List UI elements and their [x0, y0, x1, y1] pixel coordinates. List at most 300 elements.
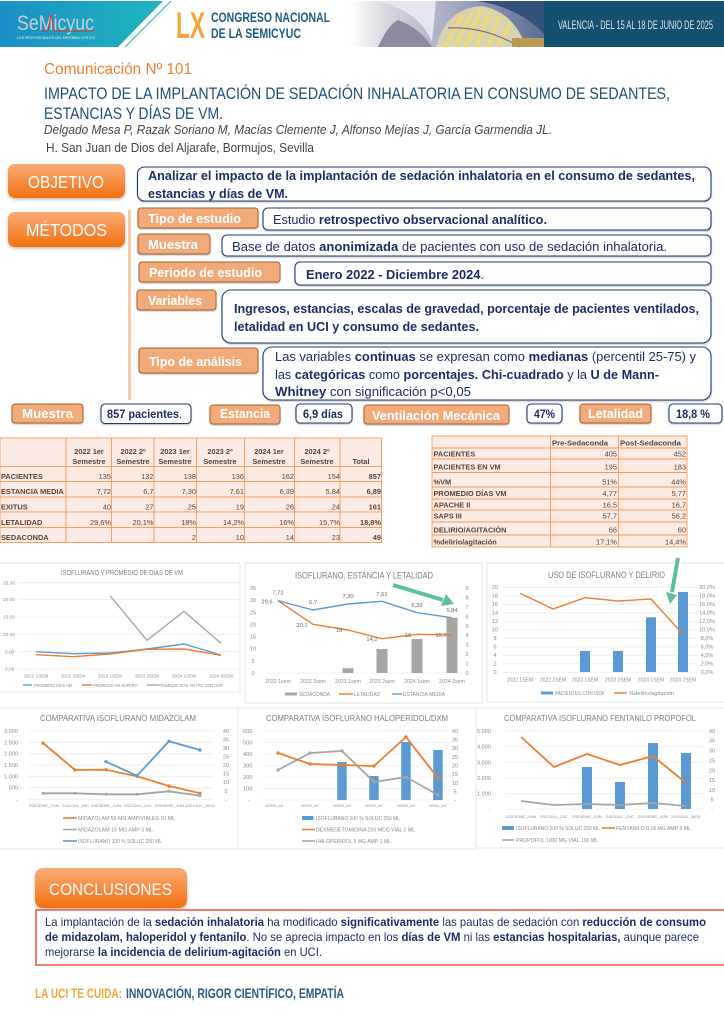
- box: analisis: [263, 347, 711, 400]
- chart: uso de isoflurano y delirio: 10: [492, 628, 498, 634]
- chart: comparativa isoflurano midazolam: MIDAZOLAM 15 MG AMP 3 ML: [78, 828, 153, 834]
- table: semesters: 6,89: [367, 487, 381, 496]
- chart: comparativa isoflurano midazolam: 10: [223, 780, 229, 786]
- table: semesters: 2023 1er: [160, 447, 190, 456]
- chart: comparativa isoflurano haloperidol/dxm: 2023ENE_JUN: [333, 803, 351, 808]
- button: metodos: MÉTODOS: [26, 220, 107, 240]
- chart: isoflurano, estancia y letalidad: 7,72: [272, 590, 284, 596]
- chart: isoflurano, estancia y letalidad: 2022 2sem: [300, 679, 326, 685]
- chart: isoflurano y promedio de dias de VM: 0,00: [5, 667, 15, 673]
- stat: estancia: Estancia: [220, 406, 271, 421]
- chart: uso de isoflurano y delirio: 20,0%: [699, 585, 715, 591]
- chart: comparativa isoflurano fentanilo propofol: FENTANILO 0,15 MG AMP 3 ML: [616, 826, 691, 832]
- chart: uso de isoflurano y delirio: 8: [493, 636, 497, 642]
- table: semesters: 18,8%: [360, 518, 381, 527]
- chart: isoflurano, estancia y letalidad: 35: [250, 586, 256, 592]
- chart: uso de isoflurano y delirio: 18: [492, 594, 498, 600]
- chart: isoflurano, estancia y letalidad: LETALIDAD: [354, 692, 380, 698]
- chart: comparativa isoflurano haloperidol/dxm: 10: [452, 781, 458, 787]
- chart: isoflurano, estancia y letalidad: 9: [465, 586, 469, 592]
- chart: comparativa isoflurano fentanilo propofol: 25: [709, 758, 715, 764]
- table: semesters: PACIENTES: [1, 472, 43, 481]
- chart: isoflurano y promedio de dias de VM: PROMEDIO DÍAS VM PAC CON ISOF: [158, 682, 223, 688]
- chart: isoflurano, estancia y letalidad: 6,7: [309, 600, 317, 606]
- table: semesters: Semestre: [72, 457, 106, 466]
- chart: comparativa isoflurano midazolam: 500: [9, 786, 18, 792]
- chart: comparativa isoflurano midazolam: 15: [223, 772, 229, 778]
- chart: comparativa isoflurano midazolam: 25: [223, 755, 229, 761]
- chart: uso de isoflurano y delirio: 0,0%: [701, 670, 713, 676]
- table: semesters: 857: [369, 472, 381, 481]
- stat: ventilacion mecanica: 47%: [534, 407, 555, 421]
- congress name: DE LA SEMICYUC: [211, 25, 301, 41]
- chart: comparativa isoflurano haloperidol/dxm: 600: [243, 729, 252, 735]
- chart: comparativa isoflurano fentanilo propofol: ISOFLURANO 100 % SOLUC 250 ML: [516, 826, 600, 832]
- table: pre and post sedaconda: 66: [609, 526, 617, 534]
- box: periodo: Enero 2022 - Diciembre 2024 .: [306, 268, 484, 282]
- stat: estancia: [210, 404, 352, 424]
- chart: uso de isoflurano y delirio: 2022 1SEM: [507, 678, 533, 684]
- box: periodo: [295, 262, 711, 285]
- chart: uso de isoflurano y delirio: 2024 2SEM: [670, 678, 696, 684]
- table: semesters: 20,1%: [133, 518, 154, 527]
- box: variables: Ingresos, estancias, escalas de gravedad, porcentaje de pacientes ventilados,: [234, 302, 699, 316]
- table: pre and post sedaconda: 60: [678, 526, 686, 534]
- chart: uso de isoflurano y delirio: 14: [492, 610, 498, 616]
- banner date panel: [544, 1, 724, 47]
- objetivo text box: [138, 167, 711, 201]
- box: analisis: Las variables continuas se expresan como medianas (percentil 25-75) y: [275, 350, 697, 364]
- chart: comparativa isoflurano fentanilo propofol: 30: [709, 749, 715, 755]
- chart: isoflurano, estancia y letalidad: 7,30: [342, 594, 354, 600]
- chart: comparativa isoflurano midazolam: 2.000: [4, 752, 18, 758]
- congress name: CONGRESO NACIONAL: [211, 9, 330, 25]
- table: pre and post sedaconda: SAPS III: [434, 512, 462, 520]
- chart: comparativa isoflurano fentanilo propofol: 2024ENE_JUN: [638, 814, 668, 819]
- chart: comparativa isoflurano haloperidol/dxm: 15: [452, 772, 458, 778]
- table: semesters: 14: [286, 533, 294, 542]
- chart: isoflurano, estancia y letalidad: 8: [465, 596, 469, 602]
- stat: muestra: Muestra: [22, 406, 74, 421]
- chart: comparativa isoflurano haloperidol/dxm: 35: [452, 738, 458, 744]
- table: semesters: 135: [99, 472, 111, 481]
- chart: comparativa isoflurano haloperidol/dxm: 5: [453, 789, 457, 795]
- chart: comparativa isoflurano midazolam: 2023ENE_JUN: [91, 803, 121, 808]
- chart: comparativa isoflurano haloperidol/dxm: 2024JUL_NOV: [429, 803, 447, 808]
- table: pre and post sedaconda: 405: [605, 450, 617, 458]
- tag: tipo de estudio: [138, 208, 258, 228]
- chart: uso de isoflurano y delirio: 10,0%: [699, 628, 715, 634]
- stat: ventilacion mecanica: Ventilación Mecánica: [372, 408, 501, 423]
- table: semesters: 2: [192, 533, 196, 542]
- table: semesters: 10: [236, 533, 244, 542]
- chart: comparativa isoflurano midazolam: COMPARATIVA ISOFLURANO MIDAZOLAM: [40, 714, 196, 723]
- table: semesters: 5,84: [326, 487, 340, 496]
- chart: comparativa isoflurano midazolam: 3.000: [4, 729, 18, 735]
- communication number: Comunicación Nº 101: [44, 61, 192, 78]
- box: variables: [222, 290, 711, 343]
- chart: comparativa isoflurano midazolam: 1.500: [4, 763, 18, 769]
- chart: uso de isoflurano y delirio: 12,0%: [699, 619, 715, 625]
- chart: isoflurano, estancia y letalidad: 14,2: [366, 637, 378, 643]
- chart: comparativa isoflurano haloperidol/dxm: COMPARATIVA ISOFLURANO HALOPERIDOL/DXM: [266, 714, 448, 723]
- chart: comparativa isoflurano haloperidol/dxm: 500: [243, 741, 252, 747]
- table: semesters: 2022 1er: [74, 447, 104, 456]
- chart: comparativa isoflurano haloperidol/dxm: HALOPERIDOL 5 MG AMP 1 ML: [316, 839, 391, 845]
- table: pre and post sedaconda: PROMEDIO DÍAS VM: [434, 489, 507, 498]
- congress name: [176, 5, 330, 46]
- stat: ventilacion mecanica: [364, 404, 562, 424]
- chart: comparativa isoflurano midazolam: MIDAZOLAM 50 MG AMP/VIALES 10 ML: [78, 816, 175, 822]
- chart: comparativa isoflurano midazolam: 5: [224, 789, 228, 795]
- table: semesters: 162: [282, 472, 294, 481]
- table: semesters: 49: [373, 533, 381, 542]
- table: semesters: Semestre: [158, 457, 192, 466]
- chart: comparativa isoflurano haloperidol/dxm: [238, 708, 476, 849]
- conclusions text box: mejorarse la incidencia de delirium-agitación en UCI.: [45, 945, 322, 959]
- chart: comparativa isoflurano midazolam: 2023JUL_DIC: [124, 803, 152, 808]
- chart: comparativa isoflurano fentanilo propofol: 3.000: [477, 760, 491, 766]
- tag: tipo de estudio: Tipo de estudio: [148, 211, 241, 226]
- chart: isoflurano, estancia y letalidad: 20: [250, 622, 256, 628]
- banner logo panel: [0, 1, 171, 47]
- table: semesters: Semestre: [116, 457, 150, 466]
- table: semesters: 14,2%: [223, 518, 244, 527]
- conclusions text box: La implantación de la sedación inhalatoria ha modificado significativamente las pautas de sedación con reducción de consumo: [45, 915, 706, 929]
- conclusions text box: de midazolam, haloperidol y fentanilo. No se aprecia impacto en los días de VM ni las estancias hospitalarias, aunque parece: [45, 930, 699, 944]
- table: semesters: 40: [103, 502, 111, 512]
- chart: uso de isoflurano y delirio: 16: [492, 602, 498, 608]
- table: semesters: LETALIDAD: [1, 518, 43, 527]
- chart: uso de isoflurano y delirio: USO DE ISOFLURANO Y DELIRIO: [548, 570, 665, 580]
- chart: comparativa isoflurano midazolam: 2.500: [4, 740, 18, 746]
- table: pre and post sedaconda: [432, 436, 687, 547]
- arrow: delirium drop: [666, 558, 678, 604]
- table: semesters: [0, 438, 382, 542]
- chart: comparativa isoflurano haloperidol/dxm: 100: [243, 786, 252, 792]
- chart: comparativa isoflurano midazolam: 2024ENE_JUN: [155, 803, 184, 808]
- chart: isoflurano, estancia y letalidad: 7: [465, 605, 469, 611]
- chart: comparativa isoflurano fentanilo propofol: 5: [710, 798, 714, 804]
- chart: comparativa isoflurano haloperidol/dxm: 2024ENE_JUN: [397, 803, 415, 808]
- stat: letalidad: [580, 404, 722, 423]
- chart: isoflurano y promedio de dias de VM: 5,00: [5, 649, 15, 655]
- table: pre and post sedaconda: 183: [674, 462, 686, 472]
- button: metodos: [8, 212, 125, 247]
- chart: isoflurano y promedio de dias de VM: 2022 2SEM: [61, 674, 85, 678]
- chart: comparativa isoflurano fentanilo propofol: 2022JUL_DIC: [540, 814, 568, 819]
- tag: variables: [137, 290, 216, 310]
- chart: isoflurano, estancia y letalidad: 7,61: [376, 592, 388, 598]
- chart: uso de isoflurano y delirio: [487, 558, 724, 702]
- table: pre and post sedaconda: 16,7: [672, 500, 686, 510]
- button: conclusiones: CONCLUSIONES: [49, 880, 172, 899]
- table: pre and post sedaconda: %VM: [434, 478, 451, 486]
- stat: letalidad: 18,8 %: [676, 407, 710, 421]
- stat: muestra: 857 pacientes.: [107, 407, 182, 421]
- banner logo panel: LOS PROFESIONALES DEL ENFERMO CRÍTICO: [17, 36, 96, 40]
- banner architecture image: [350, 1, 544, 47]
- chart: isoflurano y promedio de dias de VM: ISOFLURANO Y PROMEDIO DE DÍAS DE VM: [61, 568, 183, 577]
- chart: comparativa isoflurano haloperidol/dxm: -: [248, 798, 250, 804]
- chart: isoflurano y promedio de dias de VM: 2023 2SEM: [135, 674, 159, 678]
- table: semesters: 2023 2º: [207, 447, 233, 456]
- footer tagline: [35, 984, 344, 1001]
- chart: isoflurano, estancia y letalidad: 2024 2sem: [439, 679, 465, 685]
- chart: uso de isoflurano y delirio: 4,0%: [701, 653, 713, 659]
- chart: isoflurano, estancia y letalidad: 16: [405, 633, 411, 639]
- table: semesters: Semestre: [252, 457, 286, 466]
- footer tagline: LA UCI TE CUIDA:: [35, 985, 122, 1001]
- chart: isoflurano, estancia y letalidad: 2024 1sem: [404, 679, 430, 685]
- chart: comparativa isoflurano fentanilo propofol: -: [711, 807, 713, 813]
- chart: comparativa isoflurano fentanilo propofol: 15: [709, 778, 715, 784]
- chart: comparativa isoflurano fentanilo propofol: 40: [709, 729, 715, 735]
- table: semesters: 2024 2º: [304, 447, 330, 456]
- chart: comparativa isoflurano fentanilo propofol: PROPOFOL 1000 MG VIAL 100 ML: [516, 838, 598, 844]
- chart: isoflurano, estancia y letalidad: 25: [250, 610, 256, 616]
- chart: isoflurano y promedio de dias de VM: PROMEDIO VM SUPERV: [93, 683, 138, 688]
- chart: isoflurano, estancia y letalidad: 2023 2sem: [369, 679, 395, 685]
- chart: comparativa isoflurano haloperidol/dxm: -: [454, 798, 456, 804]
- chart: comparativa isoflurano midazolam: 2022ENE_JUN: [29, 803, 59, 808]
- chart: comparativa isoflurano midazolam: [0, 708, 238, 849]
- chart: isoflurano y promedio de dias de VM: 2023 1SEM: [98, 674, 122, 678]
- stat: muestra: [12, 404, 191, 424]
- chart: comparativa isoflurano fentanilo propofol: COMPARATIVA ISOFLURANO FENTANILO PROPOFOL: [504, 714, 696, 723]
- chart: comparativa isoflurano haloperidol/dxm: 300: [243, 764, 252, 770]
- table: semesters: 136: [232, 472, 244, 481]
- table: semesters: 27: [145, 502, 154, 512]
- chart: isoflurano, estancia y letalidad: 2022 1sem: [265, 679, 291, 685]
- authors: Delgado Mesa P, Razak Soriano M, Macías Clemente J, Alfonso Mejías J, García Garmendia JL.: [44, 123, 552, 137]
- table: pre and post sedaconda: DELIRIO/AGITACIÓN: [434, 526, 506, 534]
- chart: isoflurano y promedio de dias de VM: 15,00: [3, 615, 15, 621]
- chart: comparativa isoflurano fentanilo propofol: -: [489, 807, 491, 813]
- button: conclusiones: [35, 868, 187, 908]
- chart: uso de isoflurano y delirio: 2022 2SEM: [540, 678, 566, 684]
- table: semesters: Semestre: [203, 457, 237, 466]
- chart: isoflurano, estancia y letalidad: ISOFLURANO, ESTANCIA Y LETALIDAD: [295, 570, 433, 580]
- table: semesters: 7,72: [97, 487, 111, 496]
- chart: uso de isoflurano y delirio: 2024 1SEM: [638, 678, 664, 684]
- table: semesters: 154: [328, 472, 340, 481]
- chart: uso de isoflurano y delirio: 20: [492, 585, 498, 591]
- title: ESTANCIAS Y DÍAS DE VM.: [44, 104, 223, 123]
- chart: comparativa isoflurano midazolam: -: [225, 797, 227, 803]
- chart: isoflurano, estancia y letalidad: SEDACONDA: [299, 692, 330, 698]
- chart: isoflurano, estancia y letalidad: 20,1: [296, 623, 308, 629]
- table: pre and post sedaconda: 51%: [602, 478, 617, 486]
- chart: uso de isoflurano y delirio: PACIENTES CON ISOF: [555, 691, 606, 697]
- chart: uso de isoflurano y delirio: 14,0%: [699, 610, 715, 616]
- chart: comparativa isoflurano fentanilo propofol: [476, 708, 724, 848]
- chart: isoflurano, estancia y letalidad: 29,6: [261, 600, 273, 606]
- chart: isoflurano y promedio de dias de VM: 20,00: [3, 597, 15, 603]
- chart: isoflurano y promedio de dias de VM: PROMEDIO DÍAS VM: [34, 682, 72, 688]
- table: semesters: 16%: [279, 518, 294, 527]
- chart: comparativa isoflurano haloperidol/dxm: 25: [452, 755, 458, 761]
- chart: isoflurano, estancia y letalidad: 5,84: [446, 608, 458, 614]
- table: semesters: 2024 1er: [254, 447, 284, 456]
- chart: comparativa isoflurano haloperidol/dxm: 20: [452, 764, 458, 770]
- table: semesters: 2022 2º: [120, 447, 146, 456]
- chart: comparativa isoflurano haloperidol/dxm: ISOFLURANO 100 % SOLUC 250 ML: [316, 816, 400, 822]
- table: semesters: 7,61: [230, 487, 244, 496]
- box: muestra: [222, 235, 711, 256]
- table: pre and post sedaconda: 452: [674, 450, 686, 458]
- table: semesters: 6,7: [143, 487, 154, 496]
- button: objetivo: OBJETIVO: [28, 172, 104, 192]
- chart: uso de isoflurano y delirio: %delirio/agitación: [629, 691, 674, 697]
- box: analisis: Whitney con significación p<0,05: [275, 385, 471, 399]
- chart: isoflurano, estancia y letalidad: 30: [250, 598, 256, 604]
- chart: isoflurano y promedio de dias de VM: 10,00: [3, 632, 15, 638]
- chart: isoflurano, estancia y letalidad: 1: [465, 662, 469, 668]
- chart: isoflurano, estancia y letalidad: 2: [465, 652, 469, 658]
- table: semesters: 19: [236, 502, 244, 512]
- chart: uso de isoflurano y delirio: 6,0%: [701, 644, 713, 650]
- table: semesters: 161: [369, 502, 381, 512]
- congress name: LX: [176, 5, 205, 46]
- chart: comparativa isoflurano haloperidol/dxm: 2023JUL_DIC: [365, 803, 383, 808]
- chart: isoflurano, estancia y letalidad: 5: [465, 624, 469, 630]
- table: semesters: EXITUS: [1, 502, 28, 512]
- table: pre and post sedaconda: Pre-Sedaconda: [552, 438, 609, 448]
- table: pre and post sedaconda: 57,7: [603, 512, 617, 520]
- table: semesters: Total: [352, 457, 370, 466]
- chart: isoflurano y promedio de dias de VM: [0, 563, 240, 692]
- tag: tipo de analisis: Tipo de análisis: [149, 354, 242, 369]
- conclusions text box: [36, 910, 724, 965]
- table: semesters: 23: [332, 533, 340, 542]
- table: semesters: 132: [141, 472, 154, 481]
- chart: isoflurano y promedio de dias de VM: 2024 1SEM: [172, 674, 196, 678]
- box: variables: letalidad en UCI y consumo de sedantes.: [234, 320, 479, 334]
- chart: comparativa isoflurano midazolam: 35: [223, 738, 229, 744]
- table: semesters: 25: [188, 502, 196, 512]
- chart: comparativa isoflurano haloperidol/dxm: DEXMEDETOMIDINA 200 MCG VIAL 2 ML: [316, 828, 415, 834]
- chart: comparativa isoflurano fentanilo propofol: 2.000: [477, 776, 491, 782]
- chart: uso de isoflurano y delirio: 2023 2SEM: [605, 678, 631, 684]
- title: [44, 84, 670, 123]
- chart: comparativa isoflurano haloperidol/dxm: 40: [452, 729, 458, 735]
- chart: comparativa isoflurano fentanilo propofol: 1.000: [477, 792, 491, 798]
- chart: isoflurano, estancia y letalidad: [245, 563, 482, 703]
- chart: comparativa isoflurano midazolam: 2022JUL_DIC: [62, 803, 89, 808]
- chart: comparativa isoflurano midazolam: 30: [223, 746, 229, 752]
- chart: isoflurano, estancia y letalidad: 0: [251, 671, 255, 677]
- box: tipo de estudio: Estudio retrospectivo observacional analítico.: [273, 213, 547, 227]
- table: semesters: ESTANCIA MEDIA: [1, 487, 64, 496]
- chart: uso de isoflurano y delirio: 0: [493, 670, 497, 676]
- chart: comparativa isoflurano fentanilo propofol: 2022ENE_JUN: [506, 814, 536, 819]
- header banner: [0, 1, 724, 47]
- chart: comparativa isoflurano fentanilo propofol: 35: [709, 739, 715, 745]
- chart: comparativa isoflurano midazolam: -: [16, 797, 18, 803]
- chart: comparativa isoflurano haloperidol/dxm: 400: [243, 752, 252, 758]
- button: objetivo: [8, 164, 125, 198]
- chart: uso de isoflurano y delirio: 6: [493, 644, 497, 650]
- table: pre and post sedaconda: Post-Sedaconda: [620, 438, 682, 448]
- methods vertical divider: [128, 210, 131, 400]
- chart: comparativa isoflurano fentanilo propofol: 10: [709, 788, 715, 794]
- tag: periodo de estudio: [139, 262, 280, 282]
- chart: isoflurano, estancia y letalidad: 0: [465, 671, 469, 677]
- chart: isoflurano y promedio de dias de VM: 2024 2SEM: [209, 674, 233, 678]
- table: pre and post sedaconda: PACIENTES EN VM: [434, 462, 501, 472]
- stat: estancia: 6,9 días: [303, 407, 343, 421]
- chart: comparativa isoflurano haloperidol/dxm: 200: [243, 775, 252, 781]
- chart: comparativa isoflurano midazolam: ISOFLURANO 100 % SOLUC 250 ML: [78, 839, 162, 845]
- chart: comparativa isoflurano fentanilo propofol: 2024JUL_NOV: [671, 814, 701, 819]
- chart: comparativa isoflurano fentanilo propofol: 2023JUL_DIC: [606, 814, 634, 819]
- chart: uso de isoflurano y delirio: 4: [493, 653, 497, 659]
- tag: tipo de analisis: [139, 348, 258, 373]
- chart: isoflurano, estancia y letalidad: 15: [250, 634, 256, 640]
- chart: comparativa isoflurano haloperidol/dxm: 2022ENE_JUN: [265, 803, 283, 808]
- table: semesters: 15,7%: [319, 518, 340, 527]
- chart: uso de isoflurano y delirio: 2,0%: [701, 662, 713, 668]
- box: tipo de estudio: [263, 208, 711, 230]
- chart: comparativa isoflurano midazolam: 20: [223, 763, 229, 769]
- table: pre and post sedaconda: 5,77: [672, 489, 686, 498]
- table: semesters: 7,30: [182, 487, 196, 496]
- table: pre and post sedaconda: 17,1%: [596, 538, 617, 546]
- arrow: downward trend: [393, 585, 454, 606]
- table: pre and post sedaconda: 56,2: [672, 512, 686, 520]
- chart: uso de isoflurano y delirio: 18,0%: [699, 594, 715, 600]
- tag: periodo de estudio: Periodo de estudio: [149, 265, 262, 280]
- chart: isoflurano, estancia y letalidad: 15,7: [435, 633, 447, 639]
- table: pre and post sedaconda: 44%: [671, 478, 686, 486]
- table: semesters: 6,39: [280, 487, 294, 496]
- chart: isoflurano, estancia y letalidad: 6,39: [411, 603, 423, 609]
- chart: isoflurano y promedio de dias de VM: 25,00: [3, 580, 15, 586]
- chart: isoflurano, estancia y letalidad: 2023 1sem: [335, 679, 361, 685]
- stat: letalidad: Letalidad: [588, 406, 643, 421]
- table: semesters: 18%: [181, 518, 196, 527]
- chart: comparativa isoflurano fentanilo propofol: 4.000: [477, 745, 491, 751]
- hospital: H. San Juan de Dios del Aljarafe, Bormujos, Sevilla: [46, 141, 314, 155]
- tag: muestra: [138, 234, 210, 254]
- chart: uso de isoflurano y delirio: 12: [492, 619, 498, 625]
- chart: isoflurano, estancia y letalidad: 18: [336, 628, 342, 634]
- table: semesters: 29,6%: [90, 518, 111, 527]
- chart: uso de isoflurano y delirio: 8,0%: [701, 636, 713, 642]
- table: pre and post sedaconda: %delirio/agitación: [434, 538, 497, 546]
- box: analisis: las categóricas como porcentajes. Chi-cuadrado y la U de Mann-: [275, 368, 659, 382]
- chart: isoflurano, estancia y letalidad: 4: [465, 633, 469, 639]
- footer tagline: INNOVACIÓN, RIGOR CIENTÍFICO, EMPATÍA: [126, 984, 344, 1001]
- table: pre and post sedaconda: APACHE II: [434, 500, 470, 510]
- banner logo panel: SeMicyuc: [17, 12, 94, 35]
- chart: isoflurano, estancia y letalidad: 6: [465, 614, 469, 620]
- chart: comparativa isoflurano midazolam: 1.000: [4, 774, 18, 780]
- chart: uso de isoflurano y delirio: 2: [493, 662, 497, 668]
- chart: comparativa isoflurano haloperidol/dxm: 30: [452, 746, 458, 752]
- table: semesters: 26: [286, 502, 294, 512]
- chart: comparativa isoflurano haloperidol/dxm: 2022JUL_DIC: [301, 803, 319, 808]
- table: semesters: 138: [184, 472, 196, 481]
- tag: variables: Variables: [148, 293, 202, 308]
- chart: comparativa isoflurano fentanilo propofol: 5.000: [477, 729, 491, 735]
- chart: uso de isoflurano y delirio: 2023 1SEM: [572, 678, 598, 684]
- table: pre and post sedaconda: 195: [605, 462, 617, 472]
- objetivo text box: estancias y días de VM.: [148, 187, 288, 201]
- chart: isoflurano, estancia y letalidad: 10: [250, 646, 256, 652]
- chart: comparativa isoflurano fentanilo propofol: 2023ENE_JUN: [572, 814, 602, 819]
